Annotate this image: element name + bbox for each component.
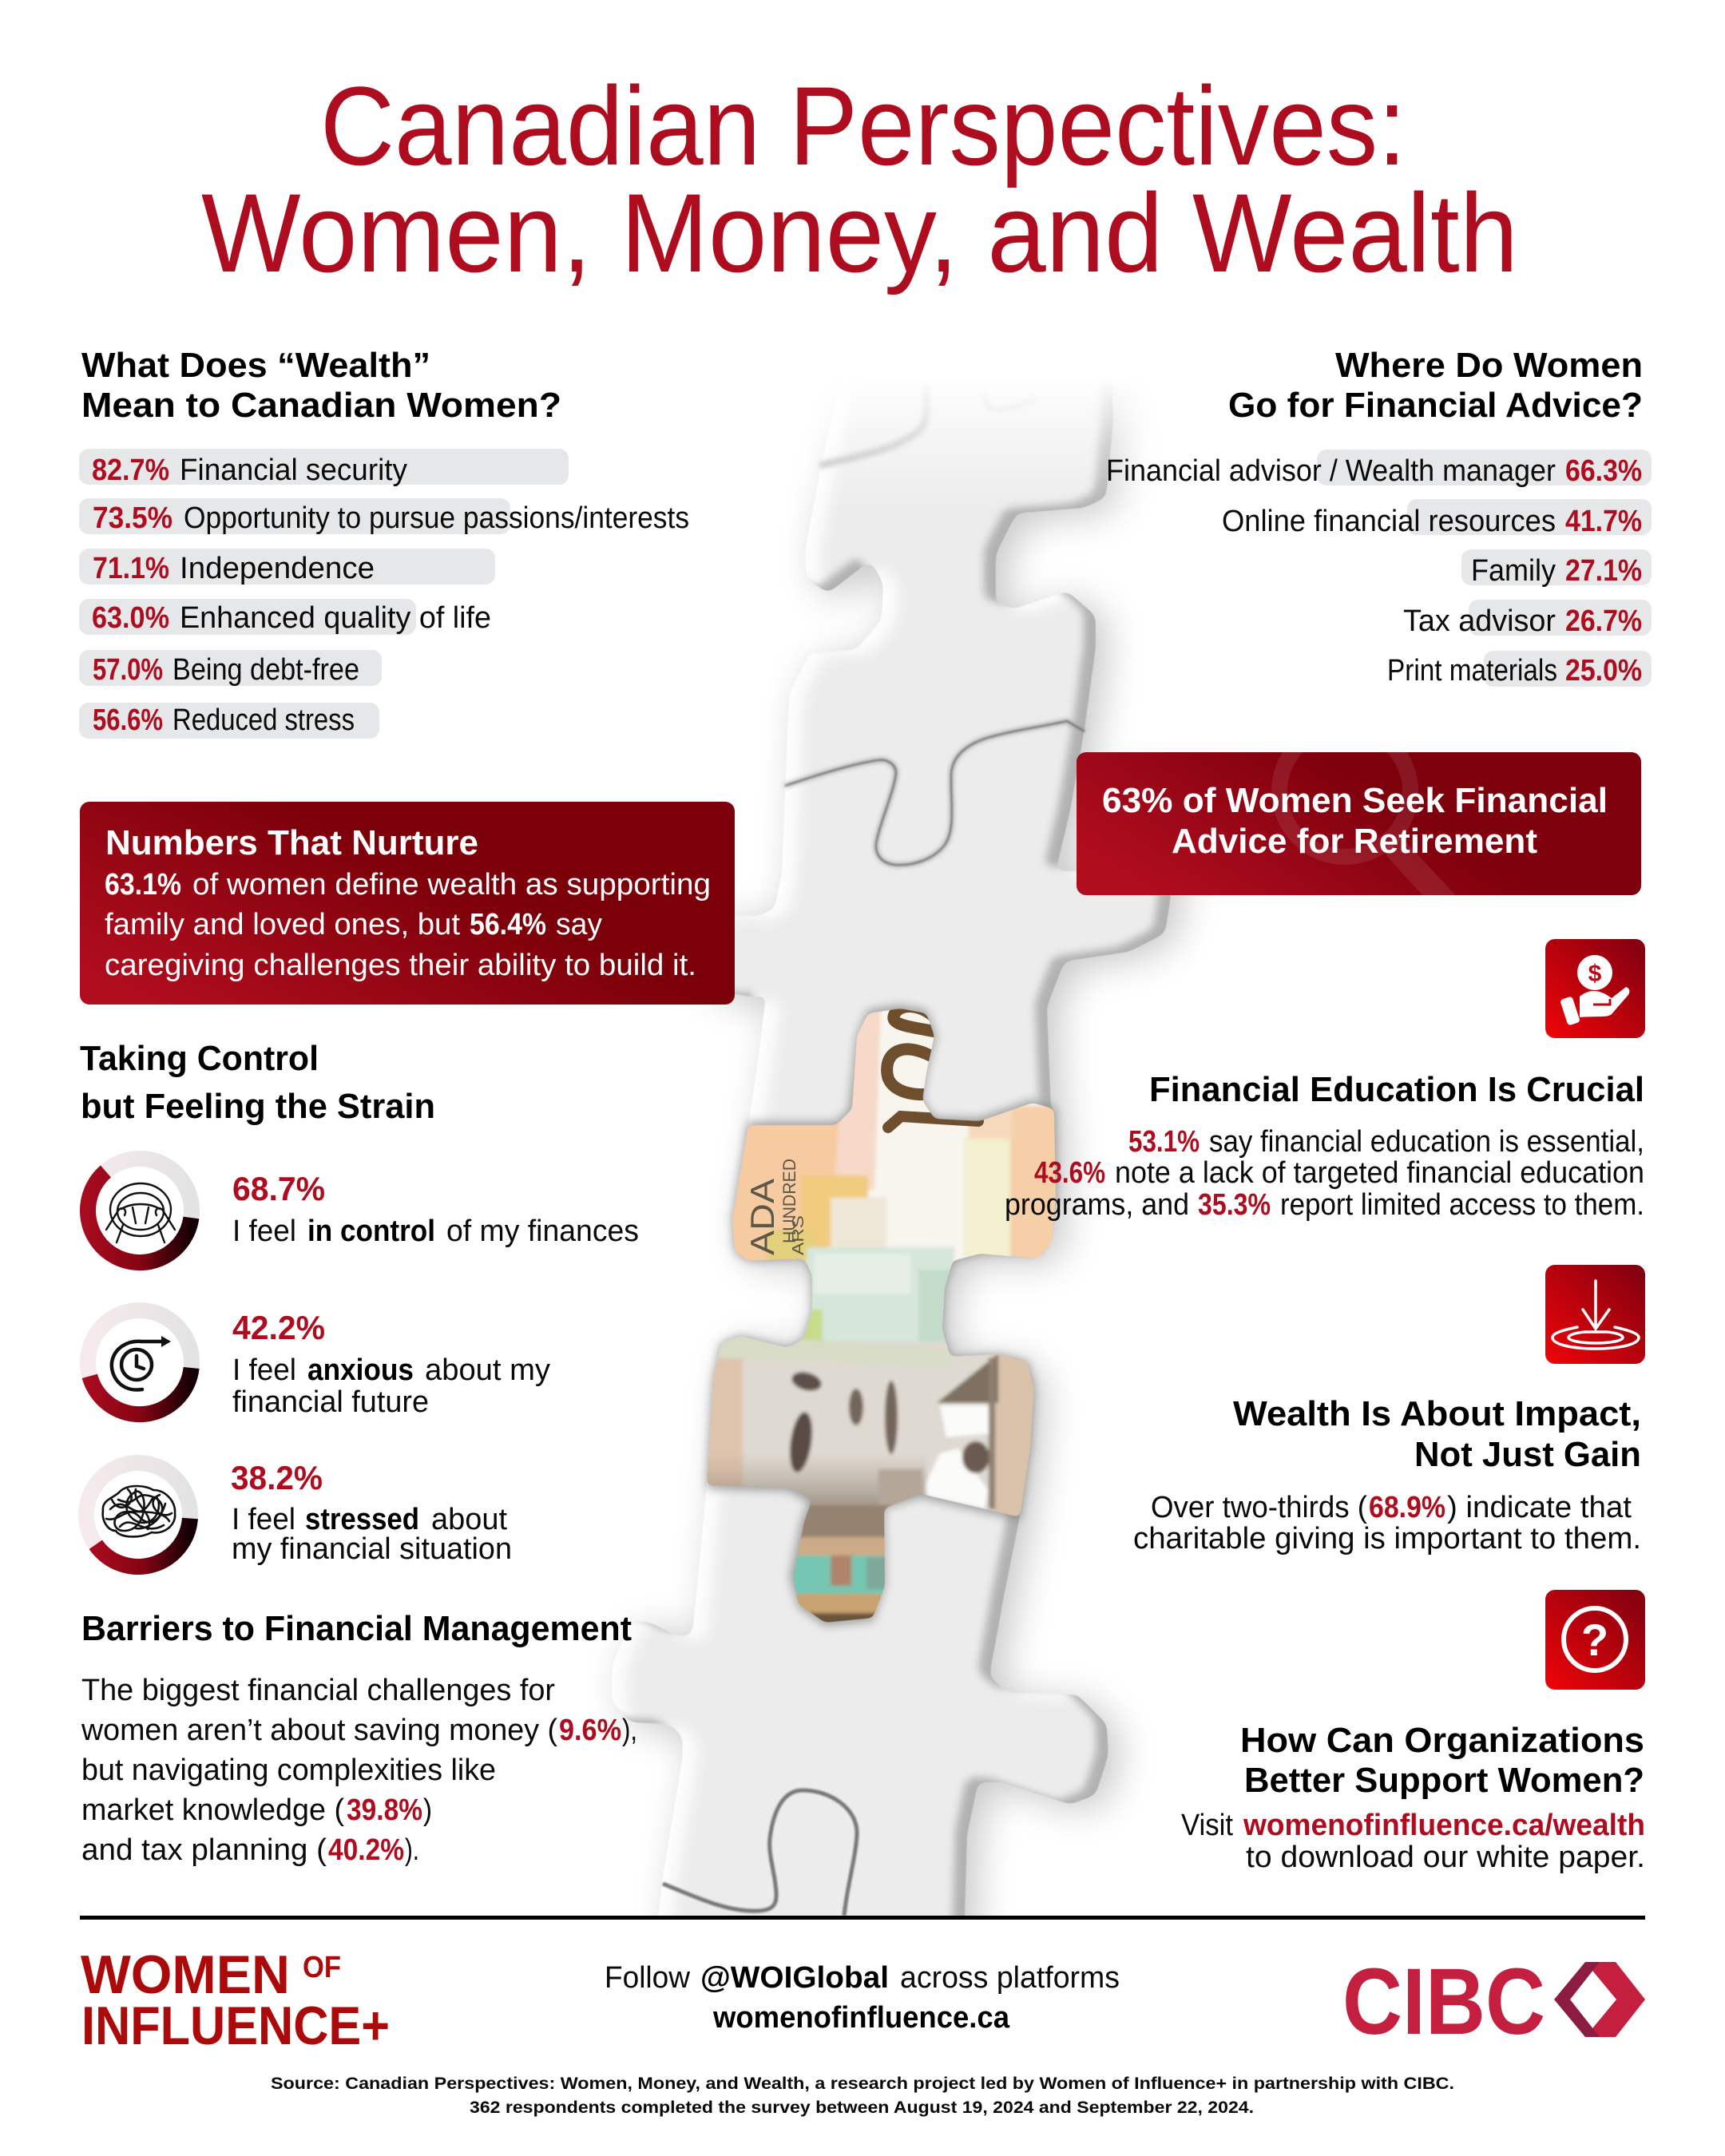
callout: 63 percent seek advice <box>1077 752 1641 895</box>
section: financial education: say financial education is essential, <box>1209 1125 1644 1159</box>
stat: anxious: about my <box>425 1353 550 1387</box>
section: how can organizations help: How Can Organizations <box>1240 1721 1644 1760</box>
icon: spiral clock <box>112 1336 171 1390</box>
callout: numbers that nurture: 63.1% <box>105 868 181 902</box>
donut: stressed 38.2% <box>86 1463 190 1567</box>
footer divider <box>80 1916 1645 1920</box>
source note <box>271 2075 1454 2117</box>
bar chart: meaning of wealth: 57.0% <box>93 653 163 687</box>
bar chart: financial advice sources: Tax advisor <box>1403 604 1556 638</box>
bar chart: meaning of wealth: 82.7% <box>92 454 169 487</box>
section: financial education: note a lack of targeted financial education <box>1115 1156 1644 1190</box>
footer: follow line: across platforms <box>900 1961 1120 1995</box>
title <box>201 63 1518 295</box>
logo: women of influence: WOMEN <box>81 1944 290 2005</box>
heading: what does wealth mean <box>81 346 561 425</box>
bar chart: financial advice sources: Family <box>1471 554 1556 588</box>
stat: in control <box>232 1170 639 1248</box>
section: wealth is about impact: charitable giving is important to them. <box>1133 1522 1641 1556</box>
heading: where do women go <box>1228 346 1643 425</box>
bar chart: financial advice sources: 25.0% <box>1565 654 1642 688</box>
section: financial education: 35.3% <box>1198 1188 1271 1222</box>
bar chart: meaning of wealth: 71.1% <box>93 552 169 585</box>
callout: numbers that nurture: say <box>556 908 602 941</box>
logo: women of influence <box>81 1944 390 2056</box>
heading: what does wealth mean: Mean to Canadian Women? <box>81 386 561 425</box>
section: barriers to financial management <box>81 1609 637 1867</box>
callout: numbers that nurture: 56.4% <box>470 908 546 941</box>
icon: question mark <box>1545 1590 1645 1690</box>
section: barriers to financial management: The biggest financial challenges for <box>81 1674 555 1707</box>
stat: anxious: financial future <box>232 1385 429 1419</box>
section: barriers to financial management: market knowledge ( <box>81 1793 344 1827</box>
section: how can organizations help: Visit <box>1181 1809 1233 1842</box>
section: barriers to financial management: 9.6% <box>559 1714 621 1747</box>
section: financial education: 53.1% <box>1128 1125 1200 1159</box>
section: barriers to financial management: and tax planning ( <box>81 1833 327 1867</box>
banknote lettering: ARS <box>790 1215 807 1255</box>
stat: stressed <box>231 1459 512 1566</box>
banknote lettering: ADA <box>744 1179 781 1255</box>
footer: follow line: Follow <box>605 1961 691 1995</box>
logo: CIBC: CIBC <box>1342 1949 1545 2055</box>
callout: 63 percent seek advice: Advice for Retirement <box>1172 822 1537 861</box>
bar chart: financial advice sources: 66.3% <box>1565 454 1642 488</box>
bar chart: meaning of wealth: Financial security <box>180 454 407 487</box>
section: barriers to financial management: ), <box>622 1714 637 1747</box>
bar chart: meaning of wealth: 63.0% <box>92 601 169 635</box>
heading: where do women go: Where Do Women <box>1335 346 1643 385</box>
icon: steering wheel with hands <box>106 1183 175 1242</box>
logo: women of influence: INFLUENCE+ <box>81 1995 390 2056</box>
section: wealth is about impact: Over two-thirds ( <box>1151 1491 1367 1524</box>
callout: 63 percent seek advice: 63% of Women Seek Financial <box>1102 781 1608 820</box>
bar chart: financial advice sources: Print materials <box>1387 654 1557 688</box>
icon: question mark: ? <box>1581 1615 1608 1665</box>
bar chart: financial advice sources: 27.1% <box>1565 554 1642 588</box>
banknote lettering: HUNDRED <box>779 1159 799 1243</box>
banknote lettering <box>751 1159 803 1255</box>
section: financial education: Financial Education Is Crucial <box>1149 1070 1644 1109</box>
section: barriers to financial management: ). <box>405 1833 419 1867</box>
bar chart: meaning of wealth <box>79 449 689 739</box>
banknote 100 numerals <box>887 1007 978 1128</box>
stat: anxious: I feel <box>232 1353 296 1387</box>
jigsaw puzzle column <box>612 351 1171 1948</box>
footer: follow line: womenofinfluence.ca <box>712 2001 1010 2035</box>
callout: numbers that nurture: caregiving challenges their ability to build it. <box>105 949 696 982</box>
icon: hand holding coin: $ <box>1588 961 1602 987</box>
heading: what does wealth mean: What Does “Wealth” <box>81 346 430 385</box>
icon: tangled brain <box>103 1486 175 1536</box>
section: financial education: programs, and <box>1005 1188 1189 1222</box>
bar chart: financial advice sources: Financial advisor / Wealth manager <box>1106 454 1556 488</box>
footer: follow line <box>605 1961 1120 2035</box>
donut: in control 68.7% <box>88 1159 192 1262</box>
icon: download ripple <box>1545 1265 1645 1364</box>
icon: magnifier watermark <box>1271 752 1455 895</box>
stat: in control: 68.7% <box>232 1170 325 1207</box>
stat: in control: of my finances <box>446 1215 639 1248</box>
section: wealth is about impact: Wealth Is About Impact, <box>1233 1394 1641 1433</box>
title: Women, Money, and Wealth <box>201 170 1518 295</box>
bar chart: financial advice sources: 26.7% <box>1565 604 1642 638</box>
heading: taking control: but Feeling the Strain <box>81 1087 435 1126</box>
section: financial education <box>1005 1070 1644 1222</box>
section: wealth is about impact: ) indicate that <box>1447 1491 1632 1524</box>
source note: Source: Canadian Perspectives: Women, Money, and Wealth, a research project led by Women of Influence+ in partnership with CIBC. <box>271 2075 1454 2093</box>
stat: stressed: stressed <box>305 1503 419 1536</box>
stat: stressed: about <box>431 1503 507 1536</box>
stat: stressed: I feel <box>232 1503 295 1536</box>
bar chart: financial advice sources: 41.7% <box>1565 505 1642 538</box>
section: how can organizations help: womenofinfluence.ca/wealth <box>1243 1809 1645 1842</box>
stat: in control: in control <box>307 1215 435 1248</box>
callout: numbers that nurture: family and loved ones, but <box>105 908 460 941</box>
stat: anxious: anxious <box>307 1353 414 1387</box>
bar chart: meaning of wealth: Reduced stress <box>172 703 355 737</box>
stat: stressed: my financial situation <box>232 1532 512 1566</box>
section: wealth is about impact: Not Just Gain <box>1414 1435 1641 1474</box>
section: wealth is about impact: 68.9% <box>1369 1491 1445 1524</box>
section: financial education: report limited access to them. <box>1280 1188 1644 1222</box>
bar chart: meaning of wealth: 56.6% <box>93 703 163 737</box>
source note: 362 respondents completed the survey between August 19, 2024 and September 22, 2024. <box>470 2099 1254 2117</box>
section: barriers to financial management: 40.2% <box>328 1833 404 1867</box>
bar chart: meaning of wealth: Being debt-free <box>172 653 359 687</box>
bar chart: financial advice sources: Online financial resources <box>1222 505 1556 538</box>
heading: taking control: Taking Control <box>80 1039 319 1078</box>
callout: numbers that nurture: of women define wealth as supporting <box>192 868 711 902</box>
bar chart: meaning of wealth: 73.5% <box>93 501 172 535</box>
bar chart: financial advice sources <box>1106 450 1652 688</box>
section: barriers to financial management: women aren’t about saving money ( <box>81 1714 557 1747</box>
bar chart: meaning of wealth: Opportunity to pursue passions/interests <box>184 501 689 535</box>
section: financial education: 43.6% <box>1034 1156 1105 1190</box>
bar chart: meaning of wealth: Independence <box>180 552 375 585</box>
logo: women of influence: OF <box>303 1951 341 1984</box>
heading: taking control <box>80 1039 435 1126</box>
stat: anxious: 42.2% <box>232 1309 325 1346</box>
stat: stressed: 38.2% <box>231 1459 323 1496</box>
bar chart: meaning of wealth: Enhanced quality of life <box>180 601 491 635</box>
callout: numbers that nurture: Numbers That Nurture <box>105 823 478 862</box>
stat: in control: I feel <box>232 1215 296 1248</box>
heading: where do women go: Go for Financial Advice? <box>1228 386 1643 425</box>
donut: anxious 42.2% <box>88 1310 192 1414</box>
section: how can organizations help: to download our white paper. <box>1246 1841 1645 1874</box>
section: how can organizations help: Better Support Women? <box>1244 1761 1644 1800</box>
footer: follow line: @WOIGlobal <box>700 1961 889 1995</box>
section: how can organizations help <box>1181 1721 1645 1874</box>
section: barriers to financial management: but navigating complexities like <box>81 1754 496 1787</box>
banknote puzzle piece <box>687 990 1070 1629</box>
section: wealth is about impact <box>1133 1394 1641 1556</box>
section: barriers to financial management: 39.8% <box>347 1793 422 1827</box>
stat: anxious <box>232 1309 550 1419</box>
title: Canadian Perspectives: <box>320 63 1406 188</box>
section: barriers to financial management: ) <box>423 1793 432 1827</box>
icon: hand holding coin <box>1545 939 1645 1038</box>
section: barriers to financial management: Barriers to Financial Management <box>81 1609 632 1648</box>
callout: numbers that nurture <box>80 802 735 1005</box>
